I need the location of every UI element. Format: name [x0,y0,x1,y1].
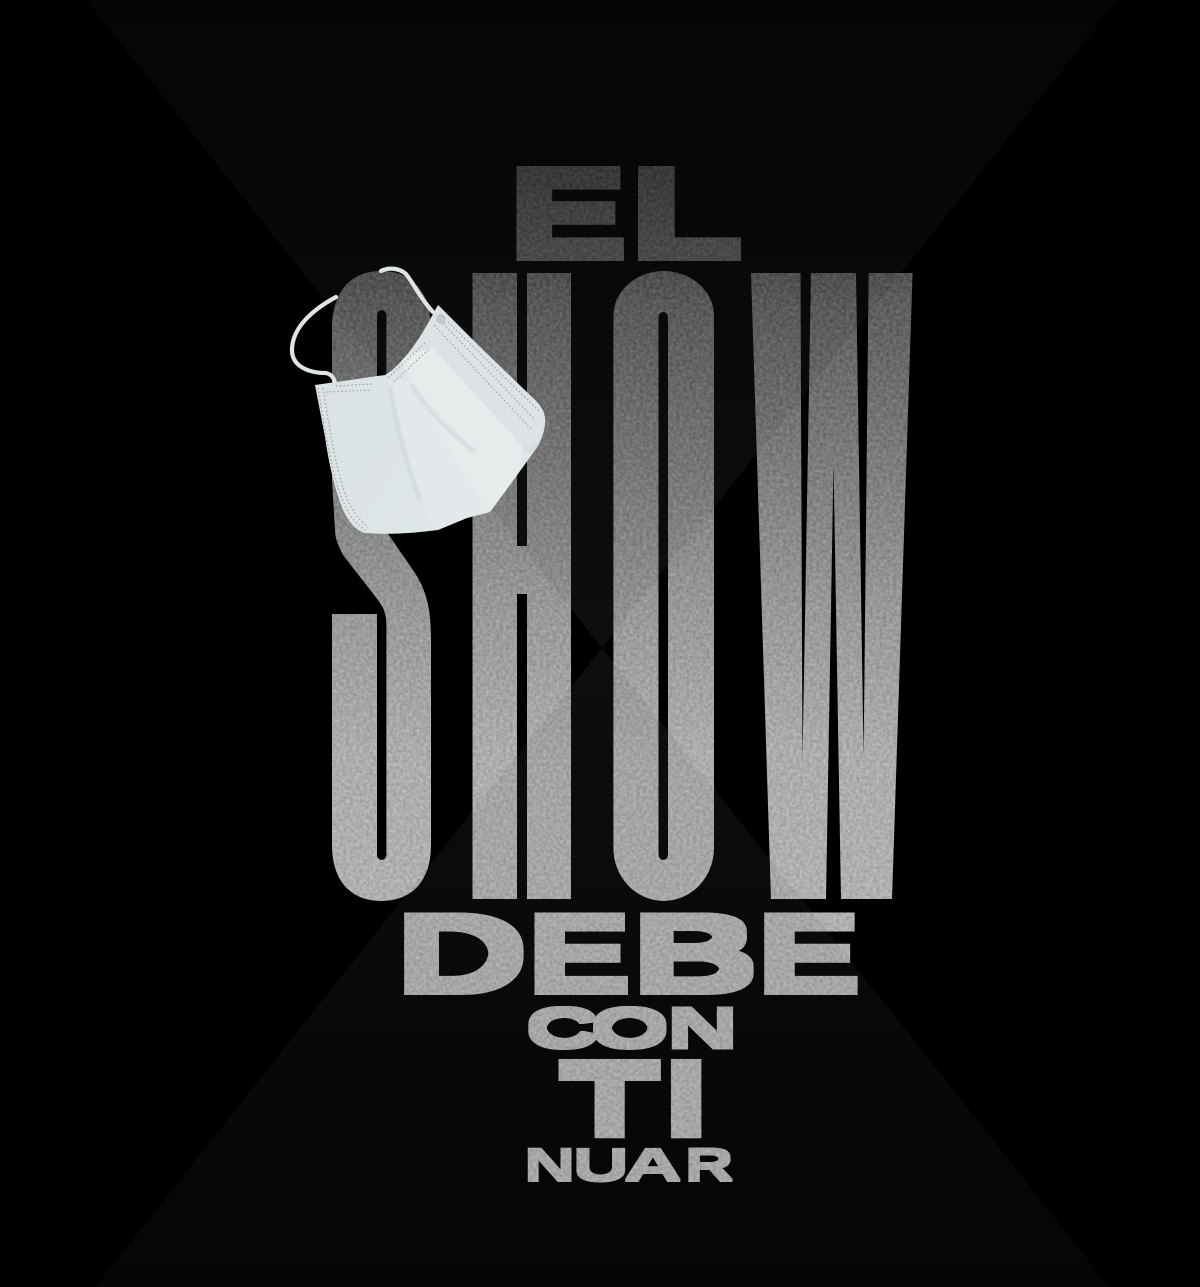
heading word: NUAR: R [685,1140,733,1191]
heading word: CON: C [526,998,598,1058]
mask ear loop [292,269,433,383]
heading word: EL: L [632,145,741,283]
heading word: CON: N [667,998,738,1058]
heading word: NUAR: N [524,1140,575,1191]
heading word: TI: I [663,1044,709,1155]
icon: surgical face mask hanging from the S [292,269,546,534]
heading word: DEBE: D [396,892,527,1016]
heading word: EL: E [510,145,625,283]
heading word: DEBE: E [758,892,859,1016]
heading word: CON: O [591,998,669,1058]
heading word: NUAR: A [624,1140,682,1191]
title: stacked headline [326,166,913,1182]
mask ear-loop weld [436,314,446,324]
mask pleats and folds [388,305,546,530]
heading word: SHOW: S [339,0,425,1198]
heading word: SHOW [332,271,913,901]
heading word: DEBE: B [633,892,757,1016]
heading word: DEBE: E [529,892,630,1016]
heading word: NUAR: U [573,1140,629,1191]
heading word: TI: T [560,1044,659,1155]
mask stitched dots [318,318,540,530]
mask body [315,305,545,534]
poster [148,74,1058,1216]
